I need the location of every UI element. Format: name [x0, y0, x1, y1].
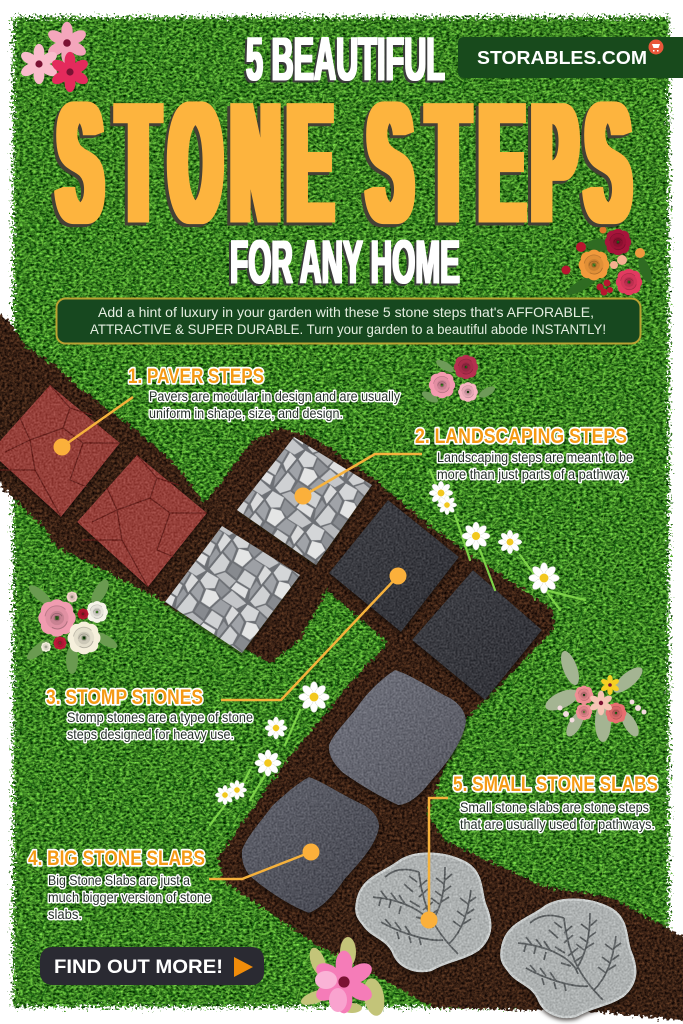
label 5: small stone slabs	[453, 773, 658, 832]
soil path	[0, 308, 683, 1022]
button: find out more	[40, 947, 264, 985]
label 4: big stone slabs: 4. BIG STONE SLABS	[28, 847, 205, 870]
stone: paver steps	[0, 385, 207, 587]
storables.com badge	[458, 37, 683, 78]
flower: top-left pink lilies	[19, 22, 90, 92]
flower: top-right orange rose bouquet	[562, 226, 654, 298]
stone: fern imprinted slabs	[356, 854, 635, 1017]
label 4: big stone slabs: much bigger version of stone	[48, 889, 211, 905]
stone: dark slate stomp stones	[329, 500, 542, 700]
label 3: stomp stones: steps designed for heavy use.	[67, 726, 234, 742]
label 4: big stone slabs: slabs.	[48, 906, 82, 922]
daisies with stems	[210, 470, 585, 825]
label 3: stomp stones: Stomp stones are a type of stone	[67, 709, 253, 725]
label 5: small stone slabs: Small stone slabs are stone steps	[460, 799, 649, 815]
flower: lower-right pastel bouquet	[542, 649, 646, 742]
button: find out more: FIND OUT MORE!	[54, 957, 223, 978]
stone: big slabs	[242, 670, 466, 913]
label 3: stomp stones: 3. STOMP STONES	[46, 686, 203, 709]
label 1: paver steps	[128, 365, 400, 421]
intro text box	[56, 298, 640, 344]
label 2: landscaping steps: more than just parts of a pathway.	[437, 466, 629, 482]
label 4: big stone slabs: Big Stone Slabs are just a	[48, 872, 190, 888]
storables.com badge: STORABLES.COM	[477, 48, 647, 68]
label 1: paver steps: 1. PAVER STEPS	[128, 365, 264, 388]
leader lines and dots	[54, 397, 448, 928]
label 2: landscaping steps	[415, 425, 633, 482]
label 2: landscaping steps: 2. LANDSCAPING STEPS	[415, 425, 627, 448]
title: stone steps: STONE STEPS	[58, 66, 630, 259]
intro text box: Add a hint of luxury in your garden with these 5 stone steps that's AFFORABLE,	[98, 304, 594, 320]
intro text box: ATTRACTIVE & SUPER DURABLE. Turn your garden to a beautiful abode INSTANTLY!	[90, 321, 606, 337]
flower: left white and pink roses	[24, 577, 120, 674]
label 2: landscaping steps: Landscaping steps are meant to be	[437, 449, 633, 465]
label 1: paver steps: Pavers are modular in design and are usually	[149, 388, 400, 404]
flower: bottom pink hibiscus	[299, 937, 387, 1017]
flower: pink roses near paver label	[420, 355, 497, 405]
label 1: paver steps: uniform in shape, size, and design.	[149, 405, 343, 421]
label 5: small stone slabs: that are usually used for pathways.	[460, 816, 655, 832]
label 4: big stone slabs	[28, 847, 211, 922]
label 3: stomp stones	[46, 686, 253, 742]
title: 5 beautiful: 5 BEAUTIFUL	[246, 25, 445, 93]
stone: landscaping mosaic steps	[165, 437, 372, 653]
